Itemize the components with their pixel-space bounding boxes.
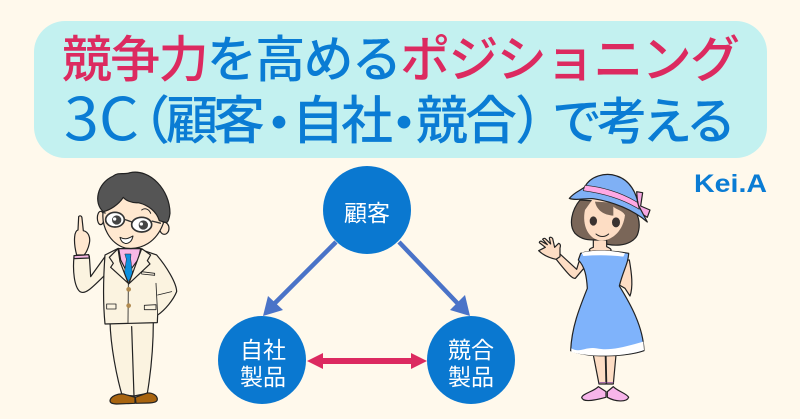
node: own product — [218, 316, 306, 404]
cuff — [74, 255, 89, 259]
illustration: woman in blue dress waving — [539, 174, 650, 401]
node: customer: 顧客 — [344, 200, 390, 226]
title line 2: 3C — [64, 72, 139, 157]
title line 2: ・ — [252, 79, 307, 159]
raised arm — [556, 254, 585, 278]
title line 2: 自社 — [292, 93, 393, 151]
jacket body — [103, 248, 177, 324]
title line 2: ・ — [376, 79, 432, 159]
hat bow — [637, 192, 650, 217]
hair back — [571, 200, 639, 245]
node: competitor product: 製品 — [448, 364, 494, 390]
jacket buttons — [126, 287, 131, 292]
jacket lapels — [109, 249, 128, 283]
title line 2: （ — [118, 79, 170, 154]
jacket details — [107, 272, 172, 323]
shoes — [110, 394, 135, 404]
node: own product: 自社 — [240, 337, 286, 363]
node: own product: 製品 — [240, 364, 286, 390]
necktie — [124, 254, 133, 282]
face — [103, 197, 163, 248]
author credit: Kei.A — [694, 170, 767, 198]
neck — [589, 240, 611, 253]
shirt collar — [119, 249, 141, 268]
hand with pointing finger — [74, 216, 90, 255]
mouth — [120, 236, 133, 243]
ankle straps — [599, 381, 613, 384]
glasses and eyes — [103, 212, 161, 232]
fringe — [595, 202, 627, 216]
title line 2: 競合 — [416, 93, 517, 151]
title line 2: ） — [515, 79, 567, 154]
waving hand — [539, 237, 560, 259]
smile — [596, 234, 609, 236]
face — [584, 198, 625, 241]
far arm — [619, 260, 632, 296]
hem trim — [571, 342, 644, 356]
sandals — [582, 387, 606, 401]
title line 2: 顧客 — [166, 93, 265, 151]
hair — [98, 172, 170, 223]
eyes — [590, 216, 597, 226]
title line 2 — [64, 72, 736, 159]
title line 2: で考える — [552, 94, 736, 150]
eyebrow — [142, 209, 151, 213]
title line 1: 競争力を高めるポジショニング — [62, 32, 740, 88]
arrow: customer to competitor product — [399, 242, 470, 316]
ears — [97, 211, 104, 225]
raised arm — [74, 252, 115, 292]
hat band — [583, 185, 639, 209]
arrow: customer to own product — [263, 242, 336, 316]
node: competitor product — [427, 316, 515, 404]
illustration: man in suit pointing up — [74, 172, 177, 404]
hat — [569, 174, 647, 222]
dress — [571, 251, 644, 356]
neckline trim — [582, 251, 625, 257]
arrow: own product versus competitor — [307, 353, 427, 369]
title panel — [34, 21, 767, 159]
node: customer — [323, 166, 411, 254]
node: competitor product: 競合 — [448, 337, 494, 363]
legs — [593, 355, 606, 384]
trousers — [110, 322, 153, 396]
